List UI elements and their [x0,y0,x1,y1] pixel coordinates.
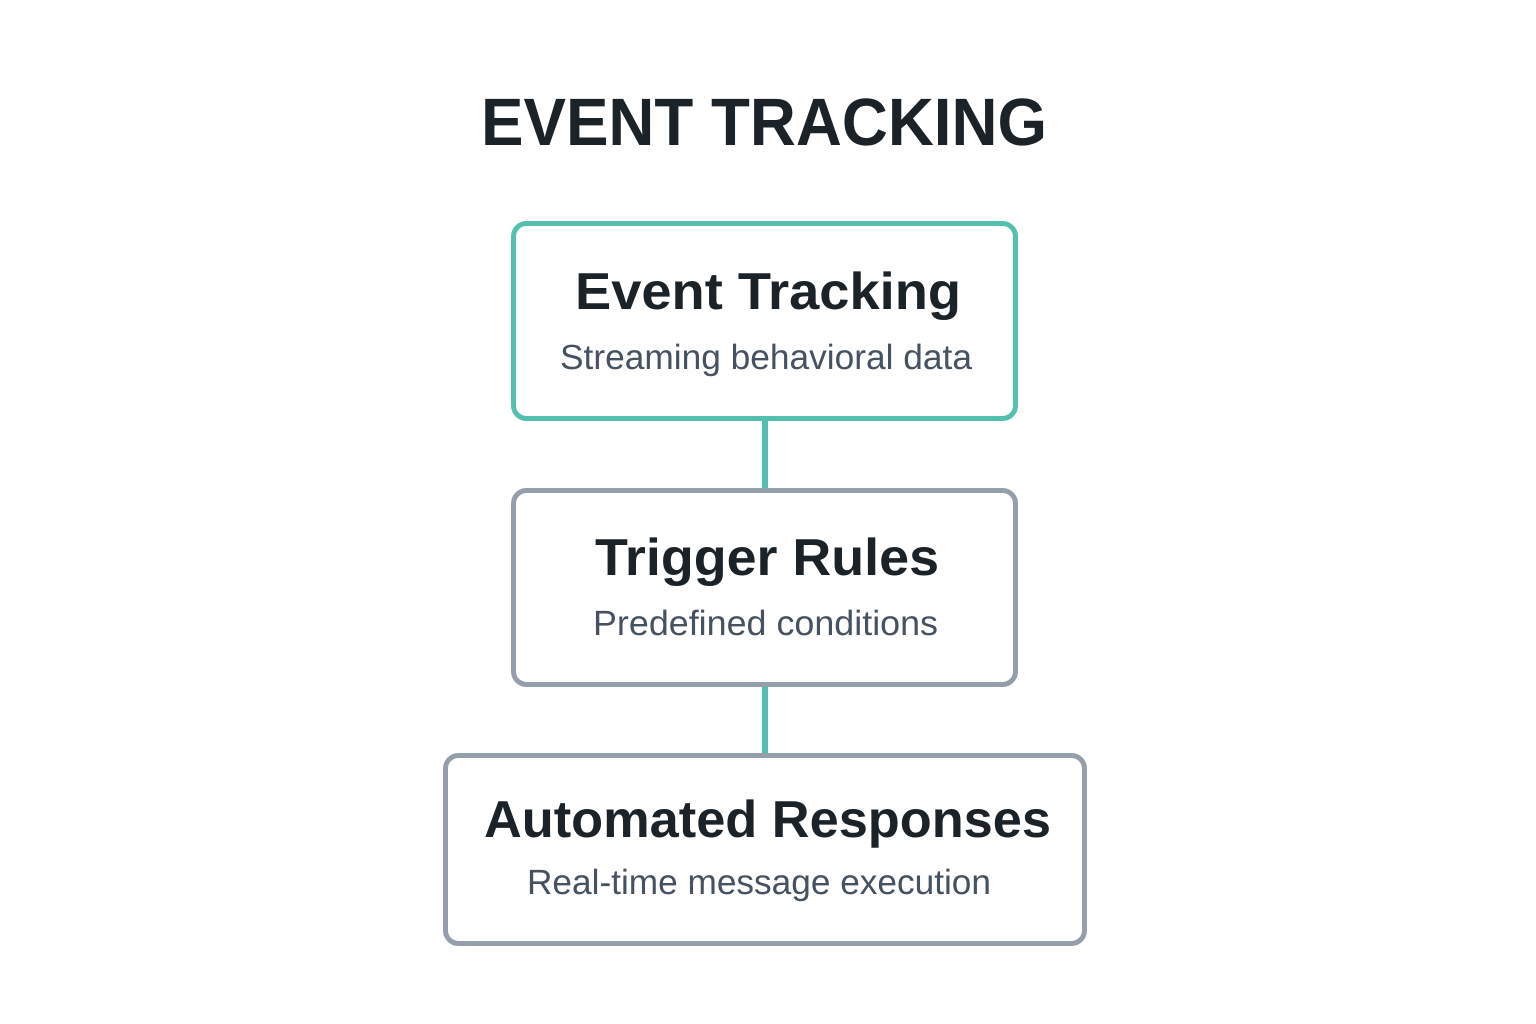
heading: event tracking: Event Tracking [575,263,961,321]
heading: automated responses: Automated Responses [484,791,1051,849]
heading: trigger rules: Trigger Rules [595,529,939,587]
panel: automated responses [446,756,1084,944]
connector: event tracking to trigger rules [762,418,768,491]
text: real-time message execution: Real-time message execution [527,863,991,902]
connector: trigger rules to automated responses [762,684,768,756]
text: streaming behavioral data: Streaming behavioral data [560,338,973,377]
panel: event tracking [514,224,1016,418]
text: predefined conditions: Predefined conditions [593,604,938,643]
title: EVENT TRACKING [481,85,1047,160]
panel: trigger rules [514,490,1016,684]
